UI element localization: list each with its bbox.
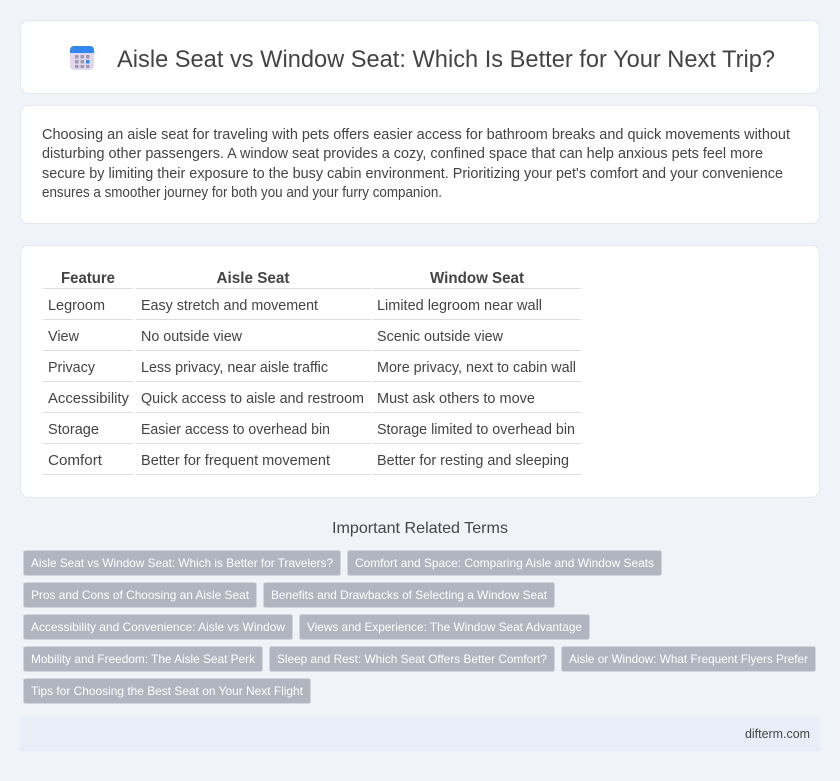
row: comfort: Better for frequent movement [141,453,330,469]
related term tags: Views and Experience: The Window Seat Advantage [307,620,582,634]
related term tags: Aisle Seat vs Window Seat: Which is Better for Travelers? [31,556,333,570]
row: view: No outside view [141,329,243,345]
panel: introduction [20,106,820,224]
row: comfort: Better for resting and sleeping [377,453,569,469]
row: legroom: Limited legroom near wall [377,298,542,314]
related term tags: Accessibility and Convenience: Aisle vs Window [31,620,285,634]
related term tags: Pros and Cons of Choosing an Aisle Seat [31,588,250,602]
related term tags: Mobility and Freedom: The Aisle Seat Perk [31,652,256,666]
related term tags: Sleep and Rest: Which Seat Offers Better Comfort? [277,652,547,666]
footer [20,717,820,751]
row: accessibility: Must ask others to move [377,391,535,407]
panel: comparison table [20,246,820,498]
text block: introduction: Choosing an aisle seat for traveling with pets offers easier access for bathroom breaks and quick movements without [42,127,790,143]
row: legroom: Legroom [48,298,105,314]
row: accessibility: Accessibility [48,391,130,407]
related term tags [24,550,816,704]
title: Aisle Seat vs Window Seat: Which Is Better for Your Next Trip? [117,46,775,73]
row: privacy: Less privacy, near aisle traffic [141,360,328,376]
table header: Window Seat [430,270,525,287]
row: storage: Storage [48,422,99,438]
row: view: Scenic outside view [377,329,504,345]
row: accessibility: Quick access to aisle and restroom [141,391,364,407]
panel: header [20,20,820,94]
row: legroom: Easy stretch and movement [141,298,318,314]
text block: introduction: secure by limiting their exposure to the busy cabin environment. Prioritizing your pet's comfort and your convenience [42,166,783,182]
icon: calendar [70,46,94,70]
related term tags: Tips for Choosing the Best Seat on Your Next Flight [31,684,304,698]
table header [61,270,525,287]
row: storage [48,422,575,438]
row: comfort [48,453,569,469]
row: legroom [48,298,542,314]
row: privacy [48,360,576,376]
row: accessibility [48,391,535,407]
related term tags: Aisle or Window: What Frequent Flyers Prefer [569,652,808,666]
text block: introduction: disturbing other passengers. A window seat provides a cozy, confined space that can help anxious pets feel more [42,146,763,162]
row: storage: Storage limited to overhead bin [377,422,575,438]
related term tags: Comfort and Space: Comparing Aisle and Window Seats [355,556,654,570]
table header: Feature [61,270,115,287]
row: comfort: Comfort [48,453,102,469]
heading: related terms: Important Related Terms [332,520,508,537]
table header: Aisle Seat [216,270,290,287]
text block: introduction [42,127,790,201]
footer: difterm.com [745,726,810,741]
row: privacy: Privacy [48,360,96,376]
related term tags: Benefits and Drawbacks of Selecting a Window Seat [271,588,548,602]
row: view [48,329,504,345]
text block: introduction: ensures a smoother journey for both you and your furry companion. [42,185,442,201]
row: storage: Easier access to overhead bin [141,422,330,438]
row: view: View [48,329,80,345]
row: privacy: More privacy, next to cabin wall [377,360,576,376]
